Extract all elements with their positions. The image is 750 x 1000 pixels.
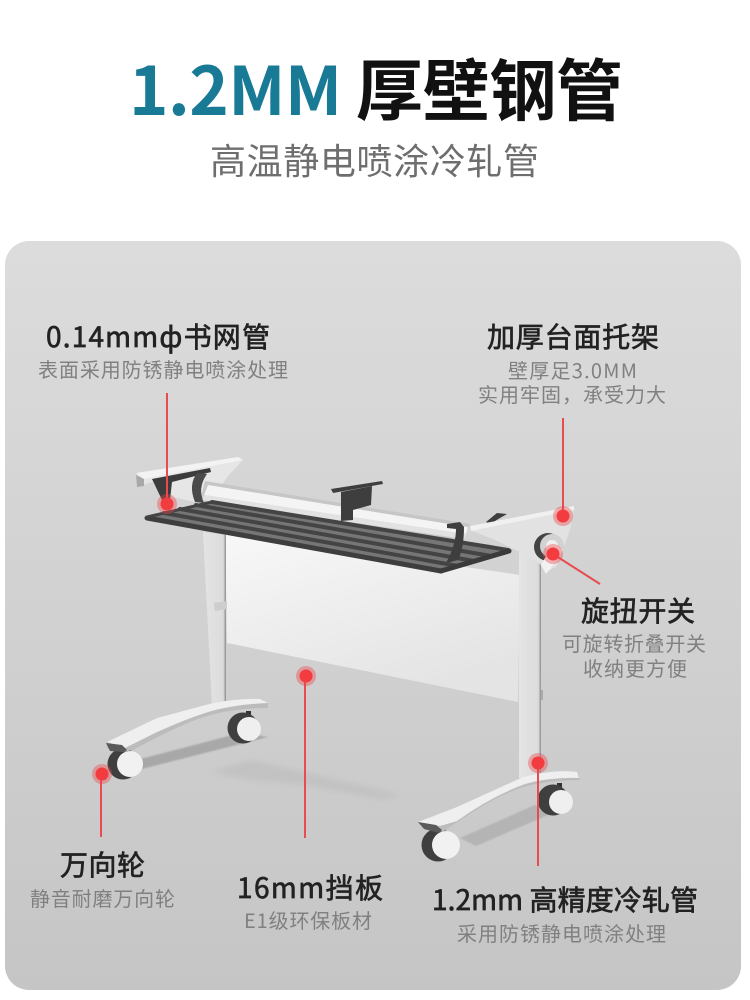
left caster wheels bbox=[108, 711, 261, 780]
callout: 16mm board: E1级环保板材 bbox=[244, 905, 372, 934]
panel: product background bbox=[5, 241, 741, 990]
floor shadows bbox=[118, 733, 555, 846]
callout: casters: 万向轮 bbox=[60, 844, 145, 884]
cross tube bbox=[200, 481, 470, 542]
callout: rotary switch: 收纳更方便 bbox=[583, 653, 687, 682]
callout: cold rolled tube bbox=[432, 753, 698, 947]
right caster wheels bbox=[422, 783, 573, 862]
callout: thick bracket: 壁厚足3.0MM bbox=[508, 355, 637, 384]
right base foot bbox=[418, 771, 580, 833]
right clip bbox=[446, 513, 507, 563]
wire shelf bbox=[147, 502, 510, 571]
callout: 0.14mm wire tube: 表面采用防锈静电喷涂处理 bbox=[38, 354, 288, 383]
product: folding table frame bbox=[106, 457, 580, 862]
collar bbox=[192, 473, 207, 503]
callout: thick bracket bbox=[478, 316, 666, 526]
left bracket bbox=[136, 457, 243, 503]
centre clip bbox=[331, 481, 383, 521]
left base foot bbox=[106, 699, 268, 752]
callout: cold rolled tube: 采用防锈静电喷涂处理 bbox=[457, 918, 666, 947]
modesty board bbox=[225, 532, 520, 702]
callout: thick bracket: 实用牢固，承受力大 bbox=[478, 379, 666, 408]
callout: cold rolled tube: 1.2mm 高精度冷轧管 bbox=[432, 879, 698, 919]
title bbox=[129, 38, 623, 135]
callout: 16mm board: 16mm挡板 bbox=[237, 867, 383, 907]
subtitle: 高温静电喷涂冷轧管 bbox=[210, 133, 539, 185]
title: 厚壁钢管 bbox=[356, 38, 623, 135]
knob switch bbox=[534, 533, 564, 574]
callout: 0.14mm wire tube bbox=[38, 316, 288, 514]
callout: 0.14mm wire tube: 0.14mmф书网管 bbox=[46, 316, 270, 356]
callout: thick bracket: 加厚台面托架 bbox=[487, 316, 659, 356]
callout: rotary switch: 可旋转折叠开关 bbox=[562, 628, 706, 657]
right bracket bbox=[470, 506, 574, 570]
callout: 16mm board bbox=[237, 666, 383, 934]
callout: rotary switch bbox=[543, 544, 706, 682]
callout: casters: 静音耐磨万向轮 bbox=[30, 883, 175, 912]
callout: rotary switch: 旋扭开关 bbox=[581, 590, 695, 630]
title: 1.2MM bbox=[129, 38, 342, 135]
left leg bbox=[203, 532, 226, 706]
callout: casters bbox=[30, 764, 175, 912]
right leg bbox=[519, 552, 541, 778]
